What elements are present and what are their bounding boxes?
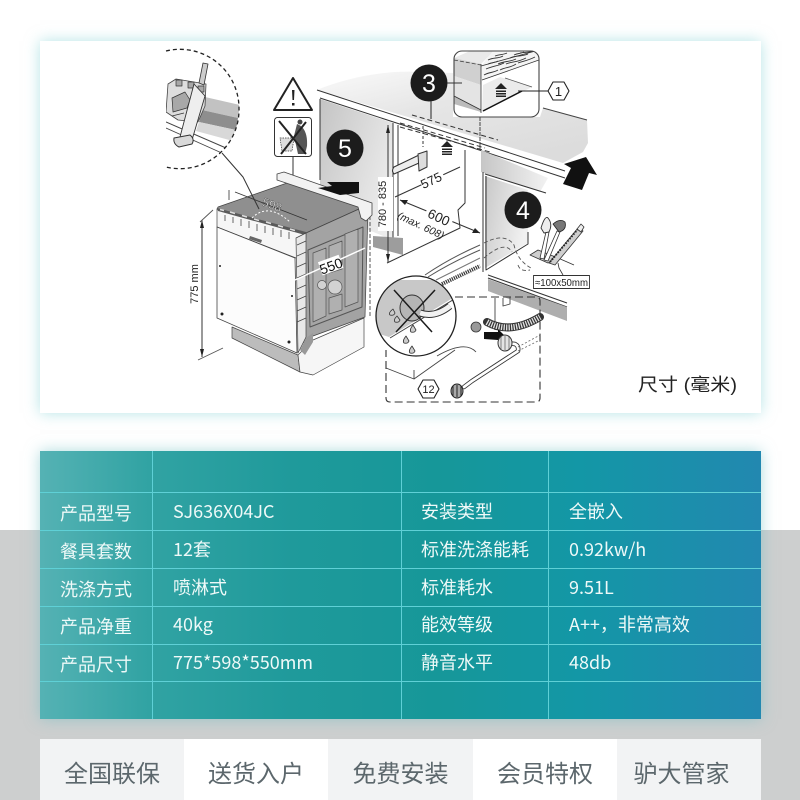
detail lens: clip on rail	[166, 49, 240, 169]
row: weight and efficiency: 40kg	[173, 611, 213, 637]
badge: nationwide warranty: 全国联保	[64, 754, 160, 789]
detail lens: leak warning	[376, 276, 456, 356]
bracket	[392, 126, 427, 174]
row: weight and efficiency: 能效等级	[421, 611, 493, 637]
row: weight and efficiency	[60, 611, 690, 639]
dishwasher	[217, 182, 370, 375]
badge: member benefits	[473, 739, 617, 800]
panel: specification table	[40, 451, 761, 719]
wall cutout and hoses	[530, 217, 584, 275]
top rail bracket	[277, 172, 372, 221]
badge: free installation: 免费安装	[352, 754, 448, 789]
row: size and noise: 48db	[569, 649, 611, 675]
dimension: depth 575 and 600	[395, 167, 480, 242]
row: wash method and water: 9.51L	[569, 574, 614, 600]
dimension: depth 575 and 600: 600	[425, 206, 452, 229]
row: weight and efficiency: A++，非常高效	[569, 611, 690, 637]
row: weight and efficiency: 产品净重	[60, 613, 132, 639]
callout hexagon 12: 12	[422, 384, 435, 396]
row: place settings and energy: 0.92kw/h	[569, 536, 646, 562]
row: model and install type: 安装类型	[421, 498, 493, 524]
dimension: height 775 mm	[189, 210, 223, 360]
connection detail dashed box	[386, 297, 540, 402]
row: model and install type: 全嵌入	[569, 498, 623, 524]
leader line from lens	[222, 153, 259, 209]
step marker 4: 4	[516, 197, 530, 225]
row: place settings and energy	[60, 536, 646, 564]
panel: installation diagram	[40, 41, 761, 413]
step marker 4	[504, 192, 542, 228]
badge: home delivery	[184, 739, 328, 800]
callout hexagon 12	[418, 380, 439, 398]
row: place settings and energy: 标准洗涤能耗	[421, 536, 529, 562]
mounting strip	[400, 100, 498, 152]
arrow: lift worktop	[563, 157, 597, 190]
routed hoses through opening	[425, 238, 533, 284]
dimension: depth 575 and 600: (max. 608)	[395, 210, 446, 242]
badge: butler service	[617, 739, 761, 800]
row: model and install type: SJ636X04JC	[173, 498, 274, 524]
badge: butler service: 驴大管家	[634, 754, 730, 789]
dimension: height 780-835	[377, 125, 393, 262]
dimension: depth 575 and 600: 575	[418, 169, 444, 192]
row: wash method and water: 喷淋式	[173, 574, 227, 600]
step marker 5	[326, 130, 364, 166]
dimension: depth 550: 550	[317, 254, 345, 278]
installation diagram illustration	[166, 48, 737, 402]
dimension: height 775 mm: 775 mm	[189, 264, 201, 304]
badge: member benefits: 会员特权	[497, 754, 593, 789]
icon: stacked up arrow	[441, 141, 453, 155]
step marker 3: 3	[422, 70, 436, 98]
row: place settings and energy: 12套	[173, 536, 211, 562]
cabinet and countertop	[317, 72, 588, 321]
cutout size label: ≈100x50mm	[535, 277, 588, 289]
row: model and install type	[60, 498, 623, 526]
badge: nationwide warranty	[40, 739, 184, 800]
service badges row	[40, 739, 761, 800]
badge: home delivery: 送货入户	[208, 754, 304, 789]
row: size and noise: 静音水平	[421, 649, 493, 675]
dimension: width 598: 598	[260, 195, 284, 215]
badge: free installation	[328, 739, 473, 800]
row: wash method and water: 洗涤方式	[60, 576, 132, 602]
dimension: width 598	[229, 190, 307, 222]
dimension: height 780-835: 780 - 835	[377, 181, 389, 227]
callout hexagon 1: 1	[555, 84, 562, 99]
dimension: depth 550	[295, 248, 365, 280]
callout hexagon 1	[518, 82, 569, 100]
row: wash method and water	[60, 574, 614, 602]
arrow: push in	[318, 182, 359, 195]
step marker 3	[410, 64, 462, 102]
caption: dimensions unit: 尺寸 (毫米)	[638, 375, 737, 395]
row: model and install type: 产品型号	[60, 500, 132, 526]
step marker 5: 5	[338, 135, 352, 163]
row: size and noise: 产品尺寸	[60, 651, 132, 677]
row: size and noise: 775*598*550mm	[173, 649, 313, 675]
icon: warning triangle	[274, 78, 312, 110]
icon: no waste bin	[274, 118, 312, 175]
row: place settings and energy: 餐具套数	[60, 538, 132, 564]
detail inset: worktop underside	[454, 50, 539, 150]
row: wash method and water: 标准耗水	[421, 574, 493, 600]
row: size and noise	[60, 649, 611, 677]
